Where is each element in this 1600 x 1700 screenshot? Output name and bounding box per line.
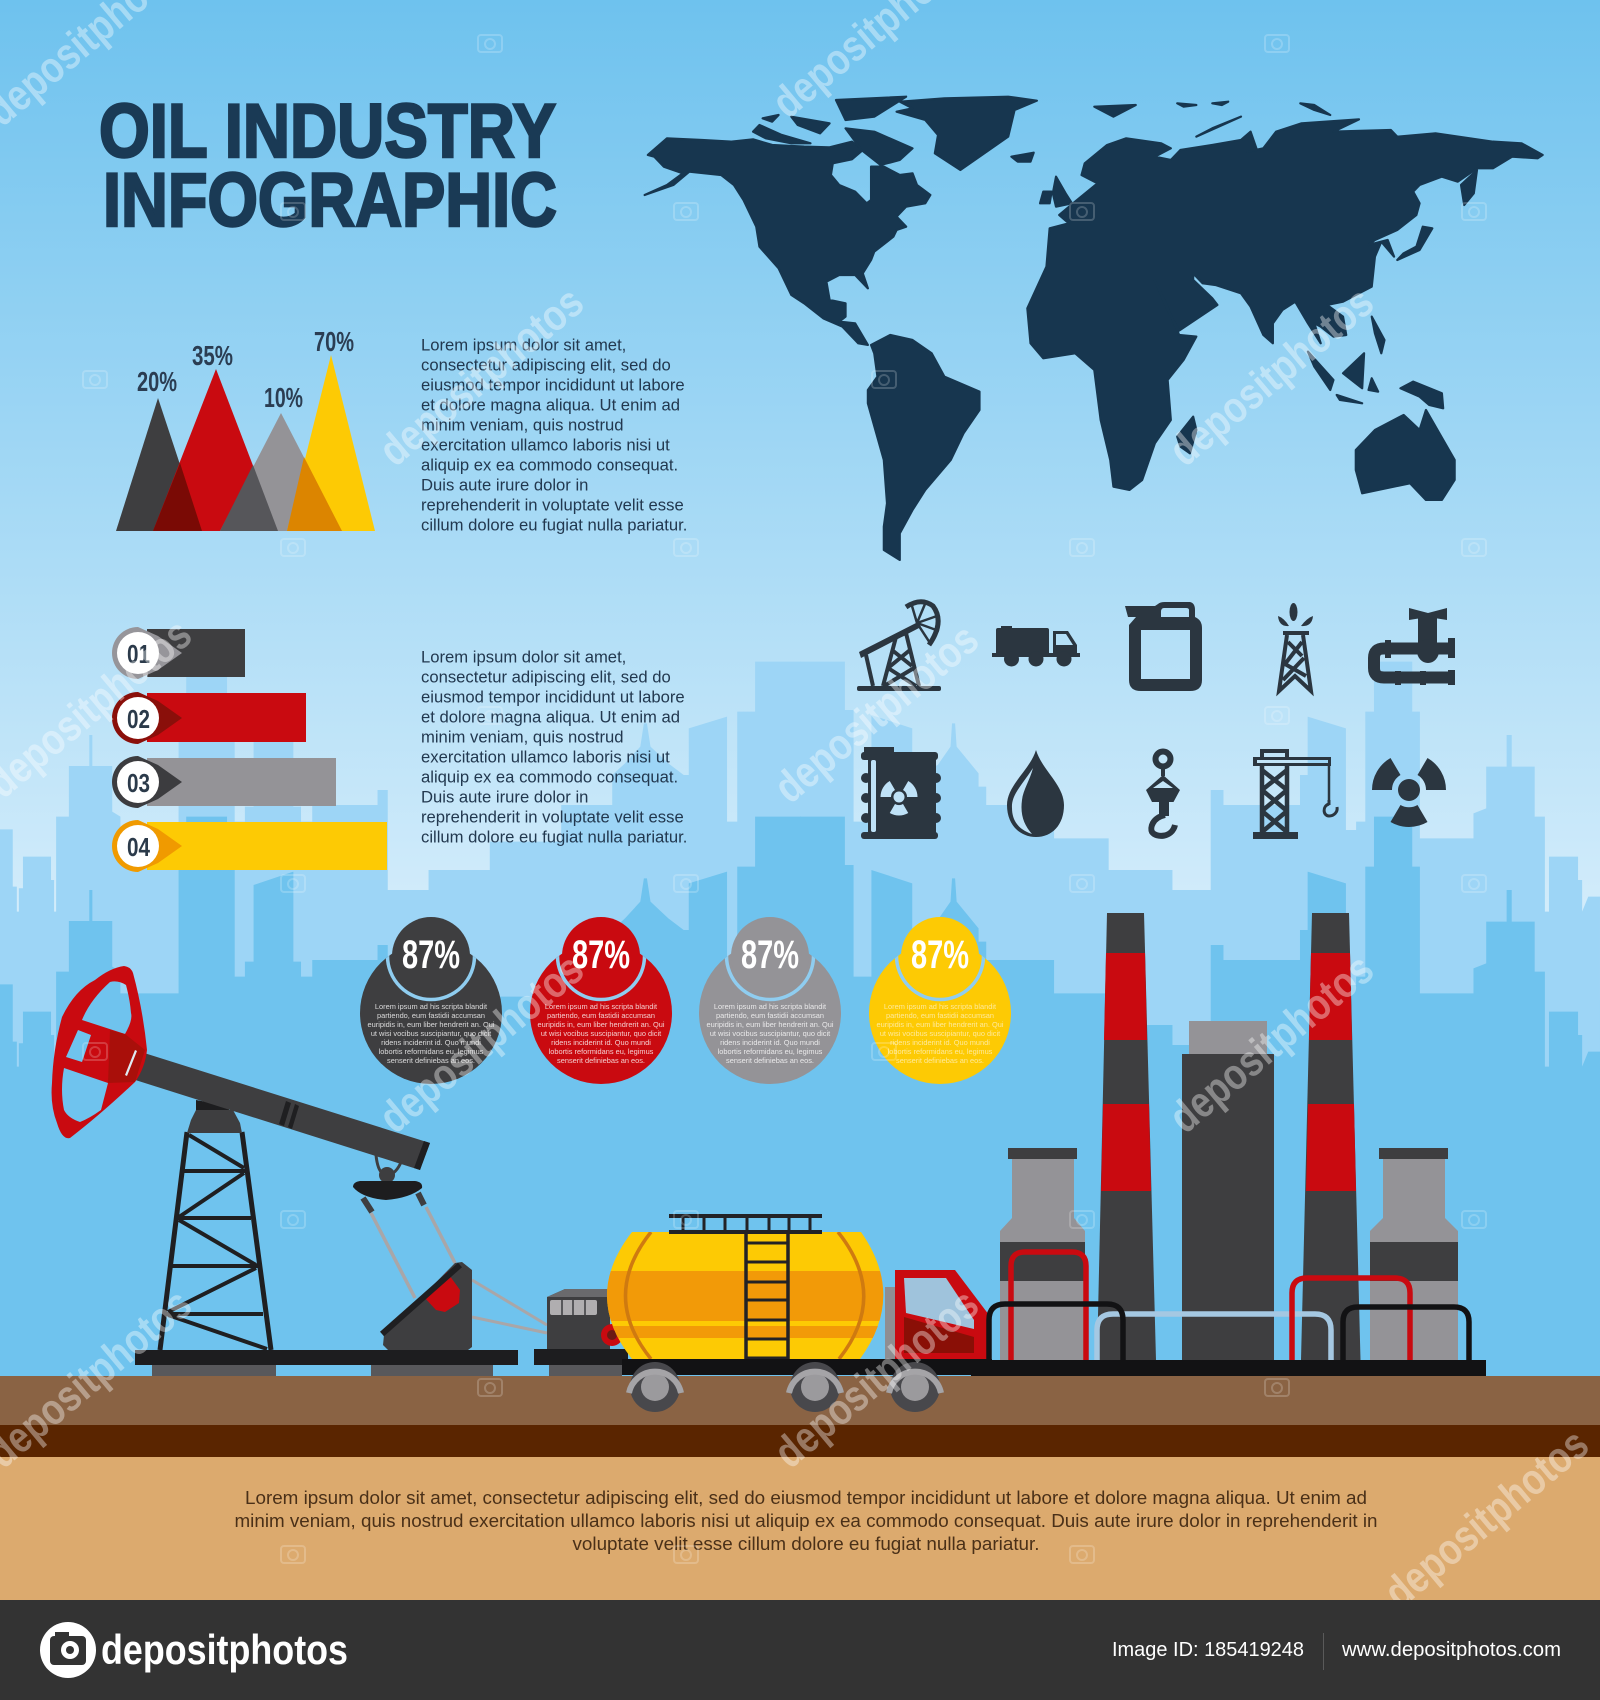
percentage bubble red: lobortis reformidans eu, legimus [549, 1047, 654, 1056]
percentage bubble dark: partiendo, eum fastidii accumsan [377, 1011, 485, 1020]
ground layers [0, 1376, 1600, 1600]
bar 04 [112, 820, 387, 872]
website: www.depositphotos.com [1341, 1639, 1561, 1661]
watermark text: depositphotos [370, 944, 593, 1143]
watermark text: depositphotos [765, 614, 988, 813]
tanker truck [534, 1216, 992, 1376]
percentage bubble grey: 87% [741, 933, 799, 977]
percentage bubble grey [699, 912, 841, 1084]
paragraph top: minim veniam, quis nostrud [421, 416, 624, 434]
icon: tanker truck [992, 626, 1080, 666]
numbered bars [112, 627, 387, 872]
percentage bubble dark: ridens inciderint id. Quo mundi [381, 1038, 481, 1047]
chimney left [1097, 913, 1156, 1360]
chart labels: 70% [314, 326, 354, 357]
watermark text: depositphotos [765, 1279, 988, 1478]
icon: radiation symbol [1372, 758, 1446, 827]
tank [600, 1232, 900, 1359]
paragraph middle: exercitation ullamco laboris nisi ut [421, 748, 670, 766]
title: INFOGRAPHIC [103, 158, 557, 243]
percentage bubble yellow: partiendo, eum fastidii accumsan [886, 1011, 994, 1020]
icon: pipes and valve [1374, 608, 1455, 685]
bar 04: 04 [127, 832, 150, 862]
icon: radioactive barrel [861, 747, 941, 839]
title: OIL INDUSTRY [99, 89, 556, 174]
hanger and rods [353, 1155, 547, 1333]
image id: Image ID: 185419248 [1112, 1639, 1304, 1661]
paragraph middle: reprehenderit in voluptate velit esse [421, 808, 684, 826]
icon: pumpjack [857, 602, 941, 691]
paragraph middle: cillum dolore eu fugiat nulla pariatur. [421, 828, 687, 846]
percentage bubble yellow: euripidis in, eum liber hendrerit an. Qui [877, 1020, 1004, 1029]
percentage bubble dark: senserit definiebas an eos. [387, 1056, 475, 1065]
paragraph middle: minim veniam, quis nostrud [421, 728, 624, 746]
percentage bubble dark: lobortis reformidans eu, legimus [379, 1047, 484, 1056]
paragraph middle: aliquip ex ea commodo consequat. [421, 768, 678, 786]
bar 02 [112, 692, 306, 744]
chassis [622, 1359, 992, 1375]
percentage bubble grey: partiendo, eum fastidii accumsan [716, 1011, 824, 1020]
watermark text: depositphotos [1160, 277, 1383, 476]
derrick frame [160, 1132, 271, 1350]
percentage bubble red: partiendo, eum fastidii accumsan [547, 1011, 655, 1020]
chart labels: 35% [192, 340, 233, 371]
paragraph top: aliquip ex ea commodo consequat. [421, 456, 678, 474]
footer bar [0, 1600, 1600, 1700]
pump base [152, 1365, 276, 1376]
cab [885, 1270, 989, 1360]
icon: oil drop [1007, 750, 1064, 837]
percentage bubble red: ridens inciderint id. Quo mundi [551, 1038, 651, 1047]
bar 03: 03 [127, 768, 150, 798]
percentage bubble grey: ut wisi vocibus suscipiantur, quo dicit [710, 1029, 830, 1038]
icon grid [857, 602, 1455, 839]
percentage bubble red: senserit definiebas an eos. [557, 1056, 645, 1065]
percentage bubble yellow: Lorem ipsum ad his scripta blandit [884, 1002, 996, 1011]
percentage bubble yellow: 87% [911, 933, 969, 977]
background sky [0, 0, 1600, 1000]
bottom paragraph: Lorem ipsum dolor sit amet, consectetur adipiscing elit, sed do eiusmod tempor incididunt ut labore et dolore magna aliqua. Ut enim ad [245, 1488, 1367, 1508]
paragraph top: cillum dolore eu fugiat nulla pariatur. [421, 516, 687, 534]
percentage bubble dark: 87% [402, 933, 460, 977]
icon: crane hook [1146, 752, 1180, 836]
percentage bubble grey: senserit definiebas an eos. [726, 1056, 814, 1065]
world map [645, 97, 1543, 560]
pivot [187, 1110, 242, 1133]
bar 02: 02 [127, 704, 150, 734]
squat tower left [1000, 1148, 1085, 1360]
city skyline front layer [0, 817, 1600, 1562]
percentage bubble grey: euripidis in, eum liber hendrerit an. Qui [707, 1020, 834, 1029]
bottom paragraph [234, 1488, 1378, 1554]
watermark camera marks [83, 35, 1486, 1563]
paragraph middle: Lorem ipsum dolor sit amet, [421, 648, 626, 666]
paragraph middle: Duis aute irure dolor in [421, 788, 588, 806]
percentage bubble yellow: lobortis reformidans eu, legimus [888, 1047, 993, 1056]
percentage bubble yellow: ridens inciderint id. Quo mundi [890, 1038, 990, 1047]
icon: jerry can [1125, 602, 1202, 691]
paragraph top: reprehenderit in voluptate velit esse [421, 496, 684, 514]
title [99, 89, 557, 243]
paragraph top: Duis aute irure dolor in [421, 476, 588, 494]
percentage bubble red: ut wisi vocibus suscipiantur, quo dicit [541, 1029, 661, 1038]
footer divider [1323, 1633, 1324, 1670]
icon: camera logo [40, 1622, 96, 1678]
watermark text: depositphotos [370, 277, 593, 476]
percentage bubble grey: lobortis reformidans eu, legimus [718, 1047, 823, 1056]
bar 01: 01 [127, 639, 150, 669]
city skyline back layer [0, 662, 1600, 1407]
central stack [1182, 1021, 1274, 1360]
horse head [52, 966, 147, 1138]
percentage bubble red: euripidis in, eum liber hendrerit an. Qui [538, 1020, 665, 1029]
percentage bubble grey: ridens inciderint id. Quo mundi [720, 1038, 820, 1047]
walking beam [129, 1052, 430, 1170]
refinery [971, 913, 1486, 1376]
paragraph top: et dolore magna aliqua. Ut enim ad [421, 396, 680, 414]
chart labels: 10% [264, 382, 303, 413]
percentage bubble yellow: ut wisi vocibus suscipiantur, quo dicit [880, 1029, 1000, 1038]
percentage bubble red [530, 912, 672, 1084]
paragraph middle: eiusmod tempor incididunt ut labore [421, 688, 685, 706]
pipes [989, 1252, 1469, 1360]
percentage bubble red: Lorem ipsum ad his scripta blandit [545, 1002, 657, 1011]
paragraph middle: et dolore magna aliqua. Ut enim ad [421, 708, 680, 726]
oil pump jack [52, 966, 547, 1376]
percentage bubble grey: Lorem ipsum ad his scripta blandit [714, 1002, 826, 1011]
truck wheels [629, 1362, 941, 1412]
triangle chart [116, 326, 375, 531]
icon: oil derrick [1278, 603, 1313, 691]
percentage bubble yellow: senserit definiebas an eos. [896, 1056, 984, 1065]
chimney right [1301, 913, 1360, 1360]
paragraph top: eiusmod tempor incididunt ut labore [421, 376, 685, 394]
logo wordmark: depositphotos [101, 1626, 348, 1673]
refinery base [971, 1360, 1486, 1376]
percentage bubble red: 87% [572, 933, 630, 977]
watermark text: depositphotos [1160, 944, 1383, 1143]
bottom paragraph: minim veniam, quis nostrud exercitation ullamco laboris nisi ut aliquip ex ea commodo consequat. Duis aute irure dolor in reprehenderit in [234, 1511, 1378, 1531]
bottom paragraph: voluptate velit esse cillum dolore eu fugiat nulla pariatur. [572, 1534, 1040, 1554]
truck rear engine [534, 1289, 628, 1376]
ladder [669, 1216, 822, 1371]
percentage bubble yellow [869, 912, 1011, 1084]
chart labels: 20% [137, 366, 177, 397]
crank box [382, 1262, 472, 1350]
icon: tower crane [1253, 751, 1337, 839]
squat tower right [1370, 1148, 1458, 1360]
percentage bubble dark: euripidis in, eum liber hendrerit an. Qui [368, 1020, 495, 1029]
paragraph top [421, 336, 687, 534]
paragraph top: Lorem ipsum dolor sit amet, [421, 336, 626, 354]
percentage bubble dark: ut wisi vocibus suscipiantur, quo dicit [371, 1029, 491, 1038]
paragraph top: exercitation ullamco laboris nisi ut [421, 436, 670, 454]
paragraph middle [421, 648, 687, 846]
percentage bubble dark: Lorem ipsum ad his scripta blandit [375, 1002, 487, 1011]
chart labels [137, 326, 354, 413]
bar 03 [112, 756, 336, 808]
paragraph middle: consectetur adipiscing elit, sed do [421, 668, 671, 686]
percentage bubble dark [360, 912, 502, 1084]
paragraph top: consectetur adipiscing elit, sed do [421, 356, 671, 374]
bar 01 [112, 627, 245, 679]
